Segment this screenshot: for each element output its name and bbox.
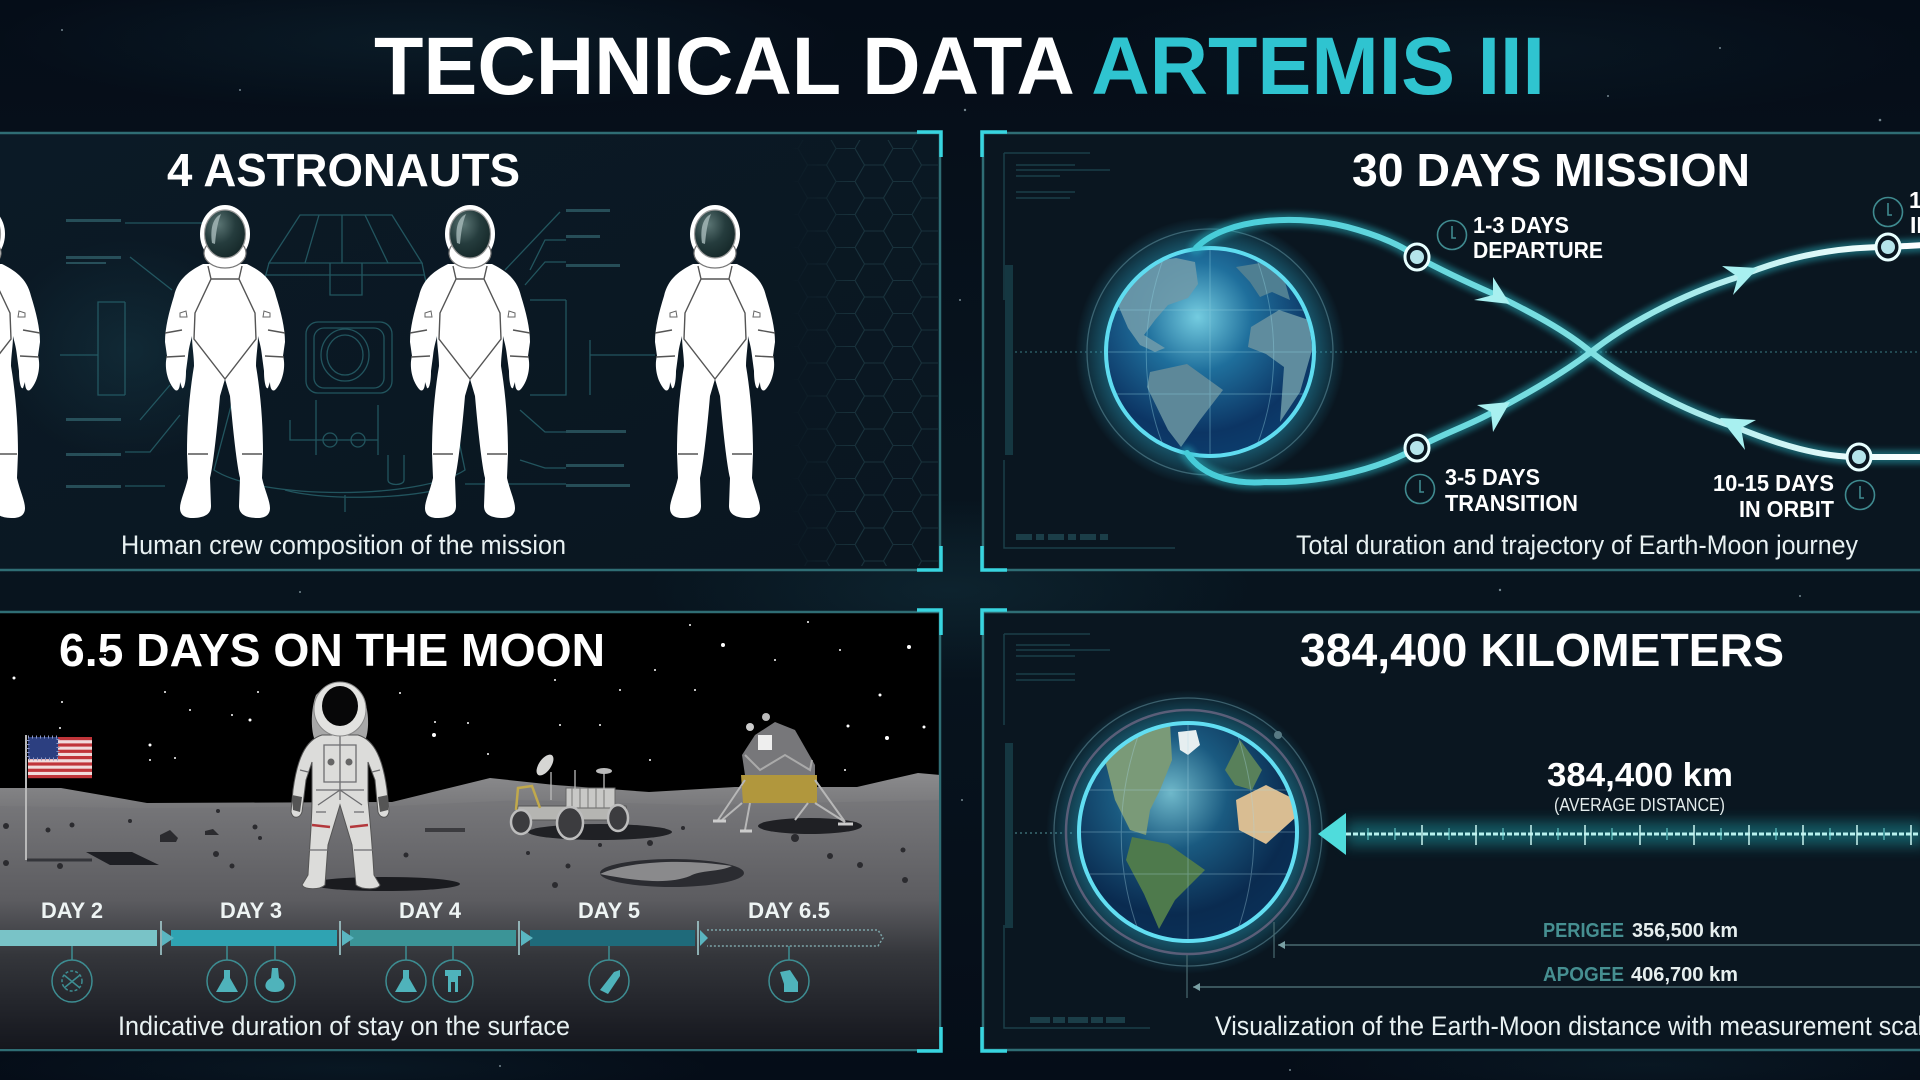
hud blueprint details	[1004, 634, 1150, 1028]
day labels	[41, 898, 830, 923]
day labels: DAY 6.5	[748, 898, 830, 923]
label: departure: 1-3 DAYS	[1473, 212, 1569, 238]
average distance label	[1547, 756, 1733, 815]
corner brackets	[982, 132, 1007, 570]
crater	[600, 859, 744, 887]
label: transition: TRANSITION	[1445, 490, 1578, 516]
day labels: DAY 5	[578, 898, 640, 923]
astronaut 2	[165, 205, 285, 518]
average distance label: (AVERAGE DISTANCE)	[1554, 795, 1725, 815]
distance arrow scale	[1318, 813, 1920, 855]
direction arrows	[1474, 266, 1758, 450]
panel: 384,400 kilometers	[982, 610, 1920, 1051]
timeline bar	[0, 921, 883, 955]
heading: 6.5 DAYS ON THE MOON	[59, 624, 605, 676]
day labels: DAY 2	[41, 898, 103, 923]
panel: 4 astronauts	[0, 132, 941, 570]
perigee: PERIGEE	[1543, 920, 1624, 942]
hud blueprint details	[1004, 153, 1175, 548]
caption: Indicative duration of stay on the surface	[118, 1011, 570, 1041]
apogee: APOGEE	[1543, 964, 1624, 986]
apogee	[1187, 955, 1920, 998]
flag shadow	[86, 852, 159, 865]
label: clipped return	[1909, 187, 1920, 238]
earth hologram	[1075, 217, 1345, 487]
lunar lander	[713, 713, 862, 834]
lunar rover	[511, 752, 672, 840]
label: departure	[1473, 212, 1603, 263]
starfield	[12, 621, 926, 771]
south america	[1147, 364, 1223, 447]
corner brackets	[917, 132, 941, 570]
label: in orbit: IN ORBIT	[1739, 496, 1834, 522]
heading: 4 ASTRONAUTS	[167, 144, 520, 196]
hexagon grid	[810, 140, 938, 566]
astronaut 1	[0, 205, 40, 518]
label: in orbit	[1713, 470, 1834, 522]
activity icons	[52, 946, 809, 1002]
caption: Human crew composition of the mission	[121, 530, 566, 560]
label: transition	[1445, 464, 1578, 516]
american flag	[26, 735, 92, 860]
perigee: 356,500 km	[1632, 920, 1738, 942]
europe	[1225, 740, 1262, 790]
day labels: DAY 4	[399, 898, 462, 923]
africa	[1248, 310, 1312, 422]
greenland	[1178, 730, 1200, 755]
earth realistic	[1046, 690, 1330, 974]
title: TECHNICAL DATA ARTEMIS III	[374, 21, 1545, 112]
rocks	[3, 809, 908, 888]
dotted axis	[1015, 351, 1920, 353]
day labels: DAY 3	[220, 898, 282, 923]
north america	[1105, 722, 1172, 835]
astronaut 4	[655, 205, 775, 518]
panel: 6.5 days on the moon	[0, 610, 941, 1051]
trajectory nodes	[1405, 234, 1900, 470]
north america	[1118, 258, 1198, 352]
panel: 30 days mission	[982, 132, 1920, 570]
apogee: 406,700 km	[1631, 964, 1738, 986]
heading: 30 DAYS MISSION	[1352, 144, 1750, 196]
lunar surface	[0, 830, 939, 1049]
blueprint callouts	[66, 209, 630, 488]
clock icons	[1406, 198, 1902, 510]
south america	[1126, 837, 1205, 929]
average distance label: 384,400 km	[1547, 756, 1733, 793]
heading: 384,400 KILOMETERS	[1300, 624, 1784, 676]
astronaut on surface	[291, 682, 460, 891]
caption: Total duration and trajectory of Earth-Moon journey	[1296, 530, 1858, 560]
moon hills	[0, 773, 939, 808]
capsule blueprint	[60, 212, 655, 512]
dotted axis	[1015, 832, 1075, 834]
label: transition: 3-5 DAYS	[1445, 464, 1540, 490]
africa	[1236, 785, 1296, 844]
label: departure: DEPARTURE	[1473, 237, 1603, 263]
corner brackets	[982, 610, 1007, 1051]
europe	[1236, 260, 1290, 300]
perigee	[1274, 920, 1920, 958]
astronaut 3	[410, 205, 530, 518]
corner brackets	[917, 610, 941, 1051]
trajectory	[1187, 220, 1920, 482]
label: in orbit: 10-15 DAYS	[1713, 470, 1834, 496]
